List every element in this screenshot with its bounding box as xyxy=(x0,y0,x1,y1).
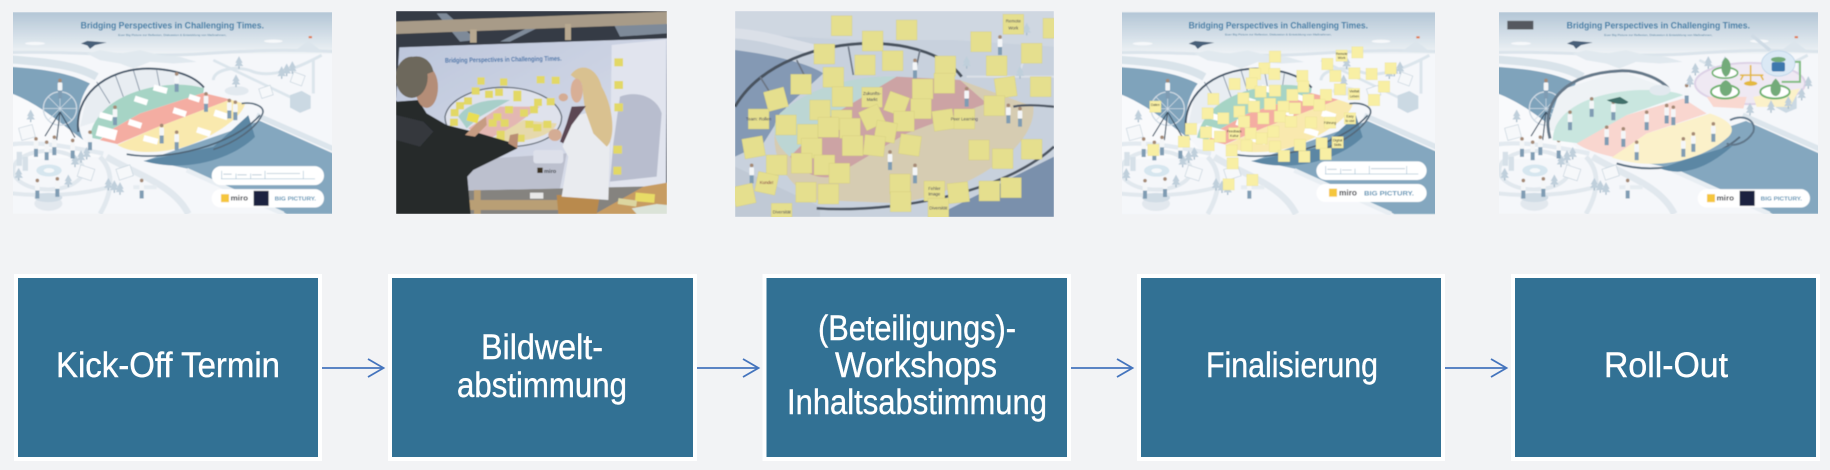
poster title: Bridging Perspectives in Challenging Times. xyxy=(81,20,264,30)
note labels: to use xyxy=(1345,119,1355,123)
poster title: Bridging Perspectives in Challenging Times. xyxy=(445,56,562,65)
handwriting on notes: Diversität xyxy=(773,209,791,214)
note labels: Easy xyxy=(1346,115,1354,119)
arrow 1 xyxy=(322,359,384,377)
person: woman in white blazer xyxy=(548,68,612,214)
poster title: Bridging Perspectives in Challenging Times. xyxy=(1189,21,1368,31)
step 3: (Beteiligungs)-Workshops Inhaltsabstimmung: Workshops xyxy=(835,346,997,385)
handwriting on notes: Fehler xyxy=(928,186,941,191)
logo pill: miro xyxy=(1717,193,1734,202)
step 2: Bildwelt-abstimmung: abstimmung xyxy=(457,366,627,405)
image: poster wall covered with handwritten sticky notes xyxy=(735,11,1054,217)
poster subtitle: Euer Big Picture zur Reflexion, Diskussion & Entwicklung von Maßnahmen, xyxy=(1604,33,1713,37)
sticky notes xyxy=(450,58,623,175)
note labels: Digital xyxy=(1333,139,1343,143)
step 3: (Beteiligungs)-Workshops Inhaltsabstimmung xyxy=(764,276,1069,459)
note labels: Feedback xyxy=(1227,130,1242,134)
logo pill: miro xyxy=(1339,188,1357,197)
table with notes xyxy=(595,183,667,214)
illustrated people xyxy=(749,35,1022,183)
timeline pill xyxy=(1316,161,1427,180)
boat with zones xyxy=(1547,71,1754,172)
handwriting on notes: Remote xyxy=(1006,19,1022,24)
note labels: Daten xyxy=(1151,103,1160,107)
handwriting on notes: Kunde! xyxy=(760,180,774,185)
handwriting on notes xyxy=(746,19,1022,214)
image: photo of workshop at poster wall xyxy=(396,11,667,214)
logo pill xyxy=(212,189,324,208)
handwriting on notes: Zukunfts- xyxy=(863,91,882,96)
miro logo xyxy=(537,168,557,175)
note labels: Kultur xyxy=(1230,134,1240,138)
logo pill xyxy=(1316,184,1427,202)
handwriting on notes: Peer Learning xyxy=(951,117,979,122)
note labels: Skills xyxy=(1334,143,1342,147)
handwriting on notes: Team: Rollen xyxy=(746,117,772,122)
person: man in leather jacket xyxy=(396,56,518,214)
logo pill: BIG PICTURY. xyxy=(1364,190,1414,197)
note labels: Vielfalt xyxy=(1349,90,1359,94)
miro logo: miro xyxy=(544,169,557,175)
handwriting on notes: Image xyxy=(928,191,941,196)
note labels: Remote xyxy=(1336,52,1348,56)
poster subtitle: Euer Big Picture zur Reflexion, Diskussion & Entwicklung von Maßnahmen, xyxy=(1225,33,1332,37)
logo pill: miro xyxy=(231,193,248,202)
step 5: Roll-Out xyxy=(1513,276,1818,459)
poster title: Bridging Perspectives in Challenging Times. xyxy=(1567,20,1750,30)
sticky notes xyxy=(1148,47,1396,190)
step 4: Finalisierung xyxy=(1139,276,1443,459)
handwriting on notes: Diversität xyxy=(929,205,948,210)
handwriting on notes: Markt xyxy=(867,97,878,102)
logo pill: BIG PICTURY. xyxy=(1761,196,1803,202)
step 1: Kick-Off Termin: Kick-Off Termin xyxy=(56,346,280,385)
image: digital poster with clustered sticky notes xyxy=(1122,12,1435,215)
banner xyxy=(396,38,667,191)
arrow 4 xyxy=(1445,359,1506,377)
step 3: (Beteiligungs)-Workshops Inhaltsabstimmung: (Beteiligungs)- xyxy=(818,309,1016,348)
logo pill xyxy=(1698,189,1810,208)
image: initial poster illustration xyxy=(13,12,332,214)
note labels: Work xyxy=(1338,56,1346,60)
step 5: Roll-Out: Roll-Out xyxy=(1604,346,1728,385)
step 1: Kick-Off Termin xyxy=(16,276,320,459)
Creative Commons badge xyxy=(1507,21,1533,30)
step 2: Bildwelt-abstimmung: Bildwelt- xyxy=(481,328,603,367)
arrow 2 xyxy=(697,359,758,377)
step 3: (Beteiligungs)-Workshops Inhaltsabstimmung: Inhaltsabstimmung xyxy=(787,383,1047,422)
image: final poster illustration xyxy=(1499,12,1818,214)
note labels: Leben xyxy=(1350,94,1359,98)
logo pill: BIG PICTURY. xyxy=(275,196,317,202)
note labels: Führung xyxy=(1324,121,1336,125)
handwriting on notes: Work xyxy=(1008,25,1019,30)
step 2: Bildwelt-abstimmung xyxy=(390,276,695,459)
vision garden xyxy=(1686,35,1813,115)
sticky notes xyxy=(732,14,1064,223)
timeline pill xyxy=(212,166,324,185)
poster subtitle: Euer Big Picture zur Reflexion, Diskussion & Entwicklung von Maßnahmen, xyxy=(118,33,227,37)
note labels xyxy=(1151,52,1359,147)
step 4: Finalisierung: Finalisierung xyxy=(1206,346,1378,385)
arch railing xyxy=(735,43,962,107)
arrow 3 xyxy=(1071,359,1132,377)
